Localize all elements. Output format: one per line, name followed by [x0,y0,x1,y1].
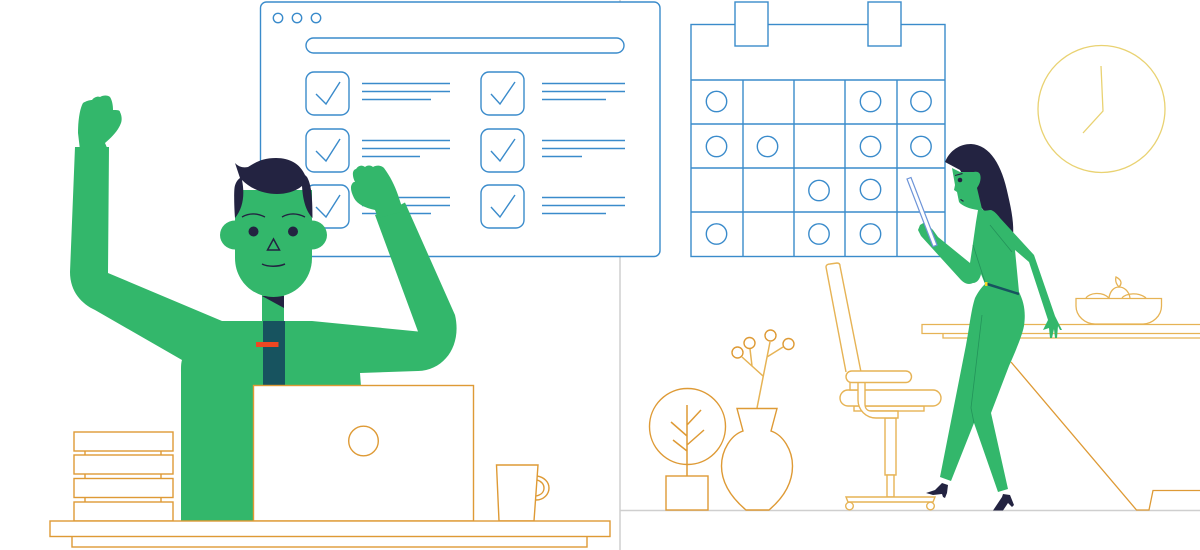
text lines [362,84,625,214]
man eyes [248,226,298,236]
chair arm support [850,382,898,418]
man mouth [262,264,285,266]
character: woman with tablet [907,144,1062,510]
collar shadow [262,296,284,308]
chair armrest [846,371,912,382]
man neck [262,290,284,330]
laptop [254,386,474,521]
address bar [306,38,624,53]
shoes [926,483,1014,510]
man hair [234,158,312,218]
chair backrest [826,263,861,372]
icon: vase with stems [722,330,794,510]
hair [945,144,1013,236]
man body and arms [70,147,457,521]
calendar grid [691,80,945,256]
man nose [268,239,280,250]
character: man raising fists [70,96,457,521]
right fist [351,166,401,218]
calendar binder tabs [735,2,901,46]
icon: wall clock [1038,46,1165,172]
checkboxes [306,72,524,228]
check marks [316,82,515,217]
man face [235,190,312,297]
calendar markers [706,91,931,244]
chair seat [840,390,941,406]
belt [987,284,1019,294]
stack of books [74,432,173,521]
calendar [691,2,945,256]
belt buckle [985,282,988,286]
chair [826,263,941,510]
desk items [50,386,610,547]
left fist [78,96,122,150]
side table with fruit bowl [922,277,1200,510]
woman body [918,168,1062,492]
woman eye and mouth [955,173,964,202]
tie clip [256,342,278,347]
mug [496,465,549,521]
window control dots [273,13,321,23]
man ears [220,220,327,250]
fruit [1086,277,1146,298]
room divider and floor [620,0,1200,550]
table top [922,324,1200,338]
tablet [907,178,937,246]
chair column and base [846,418,935,510]
icon: potted tree [650,388,726,510]
man eyebrows [242,214,305,217]
woman fold lines [971,225,1012,423]
table leg [1011,362,1200,510]
tie [263,321,285,386]
chair under seat [854,406,924,411]
desk [50,521,610,547]
panel: browser checklist window [260,2,660,256]
bowl [1076,298,1162,324]
